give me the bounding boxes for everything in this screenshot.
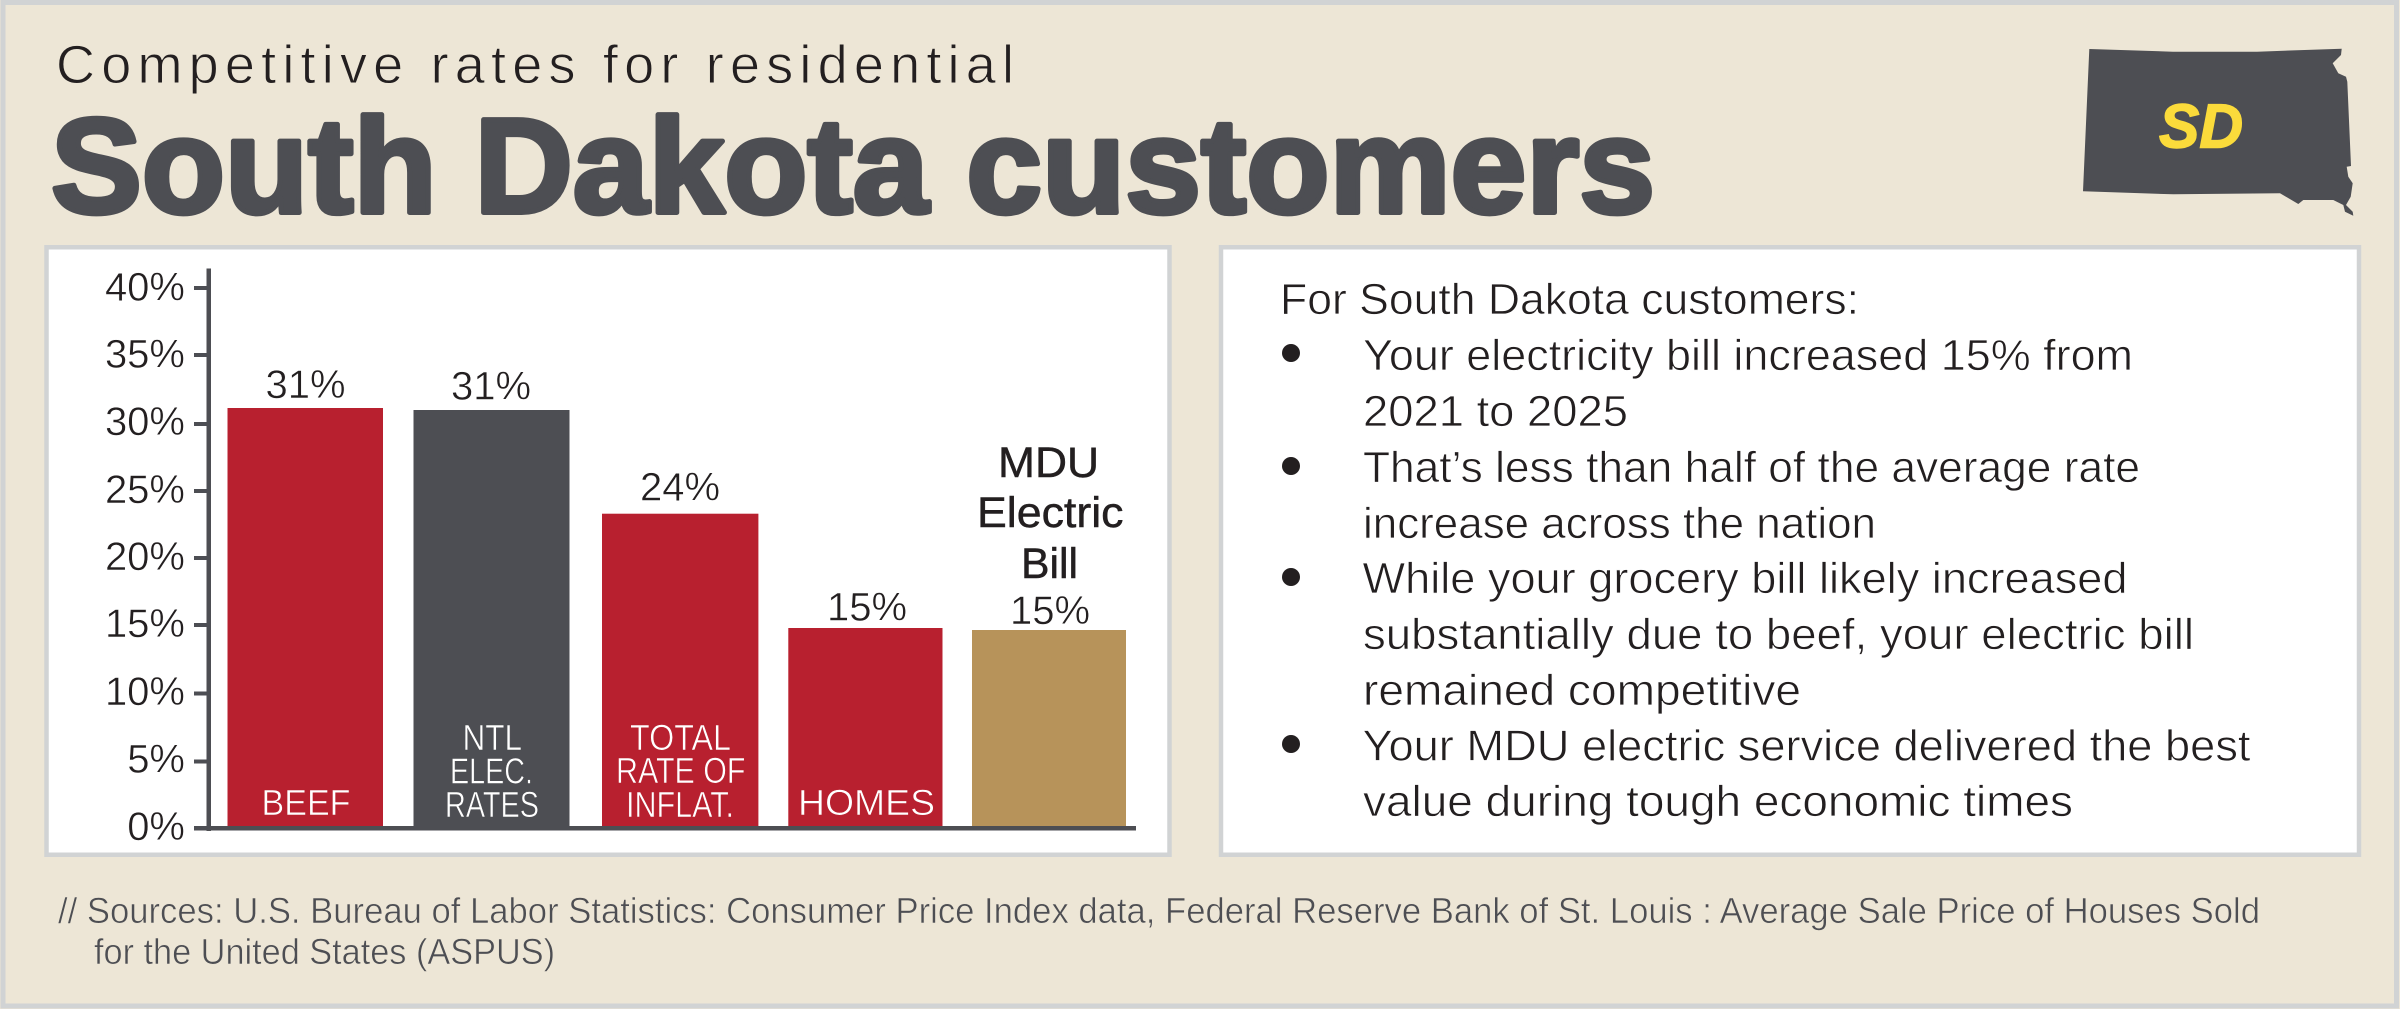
y axis labels: 15%	[105, 602, 185, 646]
bar: MDU electric bill: MDU	[998, 439, 1099, 487]
subtitle: Competitive rates for residential	[56, 35, 1014, 95]
bullet point 3: remained competitive	[1363, 666, 1801, 715]
panel: key points	[1221, 247, 2359, 855]
bar: MDU electric bill	[972, 439, 1126, 827]
bullet point 2	[1282, 443, 2140, 548]
y axis with ticks	[194, 268, 211, 831]
bar: national electric rates: 31%	[451, 364, 531, 408]
bar: beef: 31%	[265, 363, 346, 407]
key points intro: For South Dakota customers:	[1280, 275, 1859, 324]
key points panel background	[1221, 247, 2359, 855]
bar: homes: 15%	[827, 586, 907, 630]
sources footnote: for the United States (ASPUS)	[94, 931, 555, 972]
y axis labels: 35%	[105, 333, 185, 377]
bar: beef: BEEF	[262, 782, 350, 823]
state abbreviation: SD	[2159, 92, 2243, 162]
sources footnote: // Sources: U.S. Bureau of Labor Statistics: Consumer Price Index data, Federal Reserve Bank of St. Louis : Average Sale Price of Houses Sold	[58, 890, 2260, 931]
bullet point 1: Your electricity bill increased 15% from	[1363, 331, 2133, 380]
y axis labels: 40%	[105, 266, 185, 310]
bullet point 4	[1282, 722, 2250, 826]
bullet point 1: 2021 to 2025	[1363, 387, 1628, 436]
bar: national electric rates: NTL	[462, 717, 522, 758]
bar: national electric rates: RATES	[445, 784, 539, 825]
bar: MDU electric bill: Bill	[1021, 540, 1078, 588]
title: South Dakota customers	[51, 90, 1655, 242]
bullet point 1	[1282, 331, 2133, 436]
icon: South Dakota state map	[2083, 49, 2353, 216]
chart panel background	[46, 247, 1170, 855]
bar: homes	[788, 586, 942, 827]
y axis labels: 0%	[127, 805, 185, 849]
panel: bar chart	[46, 247, 1170, 855]
bar: MDU electric bill: 15%	[1010, 589, 1090, 633]
y axis labels	[105, 266, 185, 849]
bullet point 2: increase across the nation	[1363, 499, 1876, 548]
bar: total rate of inflation: INFLAT.	[626, 784, 734, 825]
y axis labels: 20%	[105, 535, 185, 579]
bullet point 3: While your grocery bill likely increased	[1362, 554, 2128, 603]
y axis labels: 30%	[105, 400, 185, 444]
y axis labels: 25%	[105, 468, 185, 512]
bar: total rate of inflation: TOTAL	[630, 717, 731, 758]
bar: beef	[228, 363, 383, 827]
bullet point 4: value during tough economic times	[1363, 777, 2073, 826]
bullet point 2: That’s less than half of the average rate	[1363, 443, 2140, 492]
bar: total rate of inflation	[602, 466, 758, 827]
bullet point 3	[1282, 554, 2194, 715]
bar: MDU electric bill: Electric	[977, 489, 1124, 537]
y axis labels: 10%	[105, 670, 185, 714]
bar: national electric rates: ELEC.	[450, 751, 533, 792]
bar: national electric rates	[414, 364, 570, 827]
bullet point 3: substantially due to beef, your electric bill	[1363, 610, 2194, 659]
bullet point 4: Your MDU electric service delivered the best	[1362, 722, 2250, 770]
bar: homes: HOMES	[798, 782, 935, 823]
x axis	[194, 826, 1136, 830]
y axis labels: 5%	[127, 738, 185, 782]
sources footnote	[58, 890, 2260, 972]
bar: total rate of inflation: RATE OF	[616, 750, 746, 791]
bar: total rate of inflation: 24%	[640, 466, 720, 510]
